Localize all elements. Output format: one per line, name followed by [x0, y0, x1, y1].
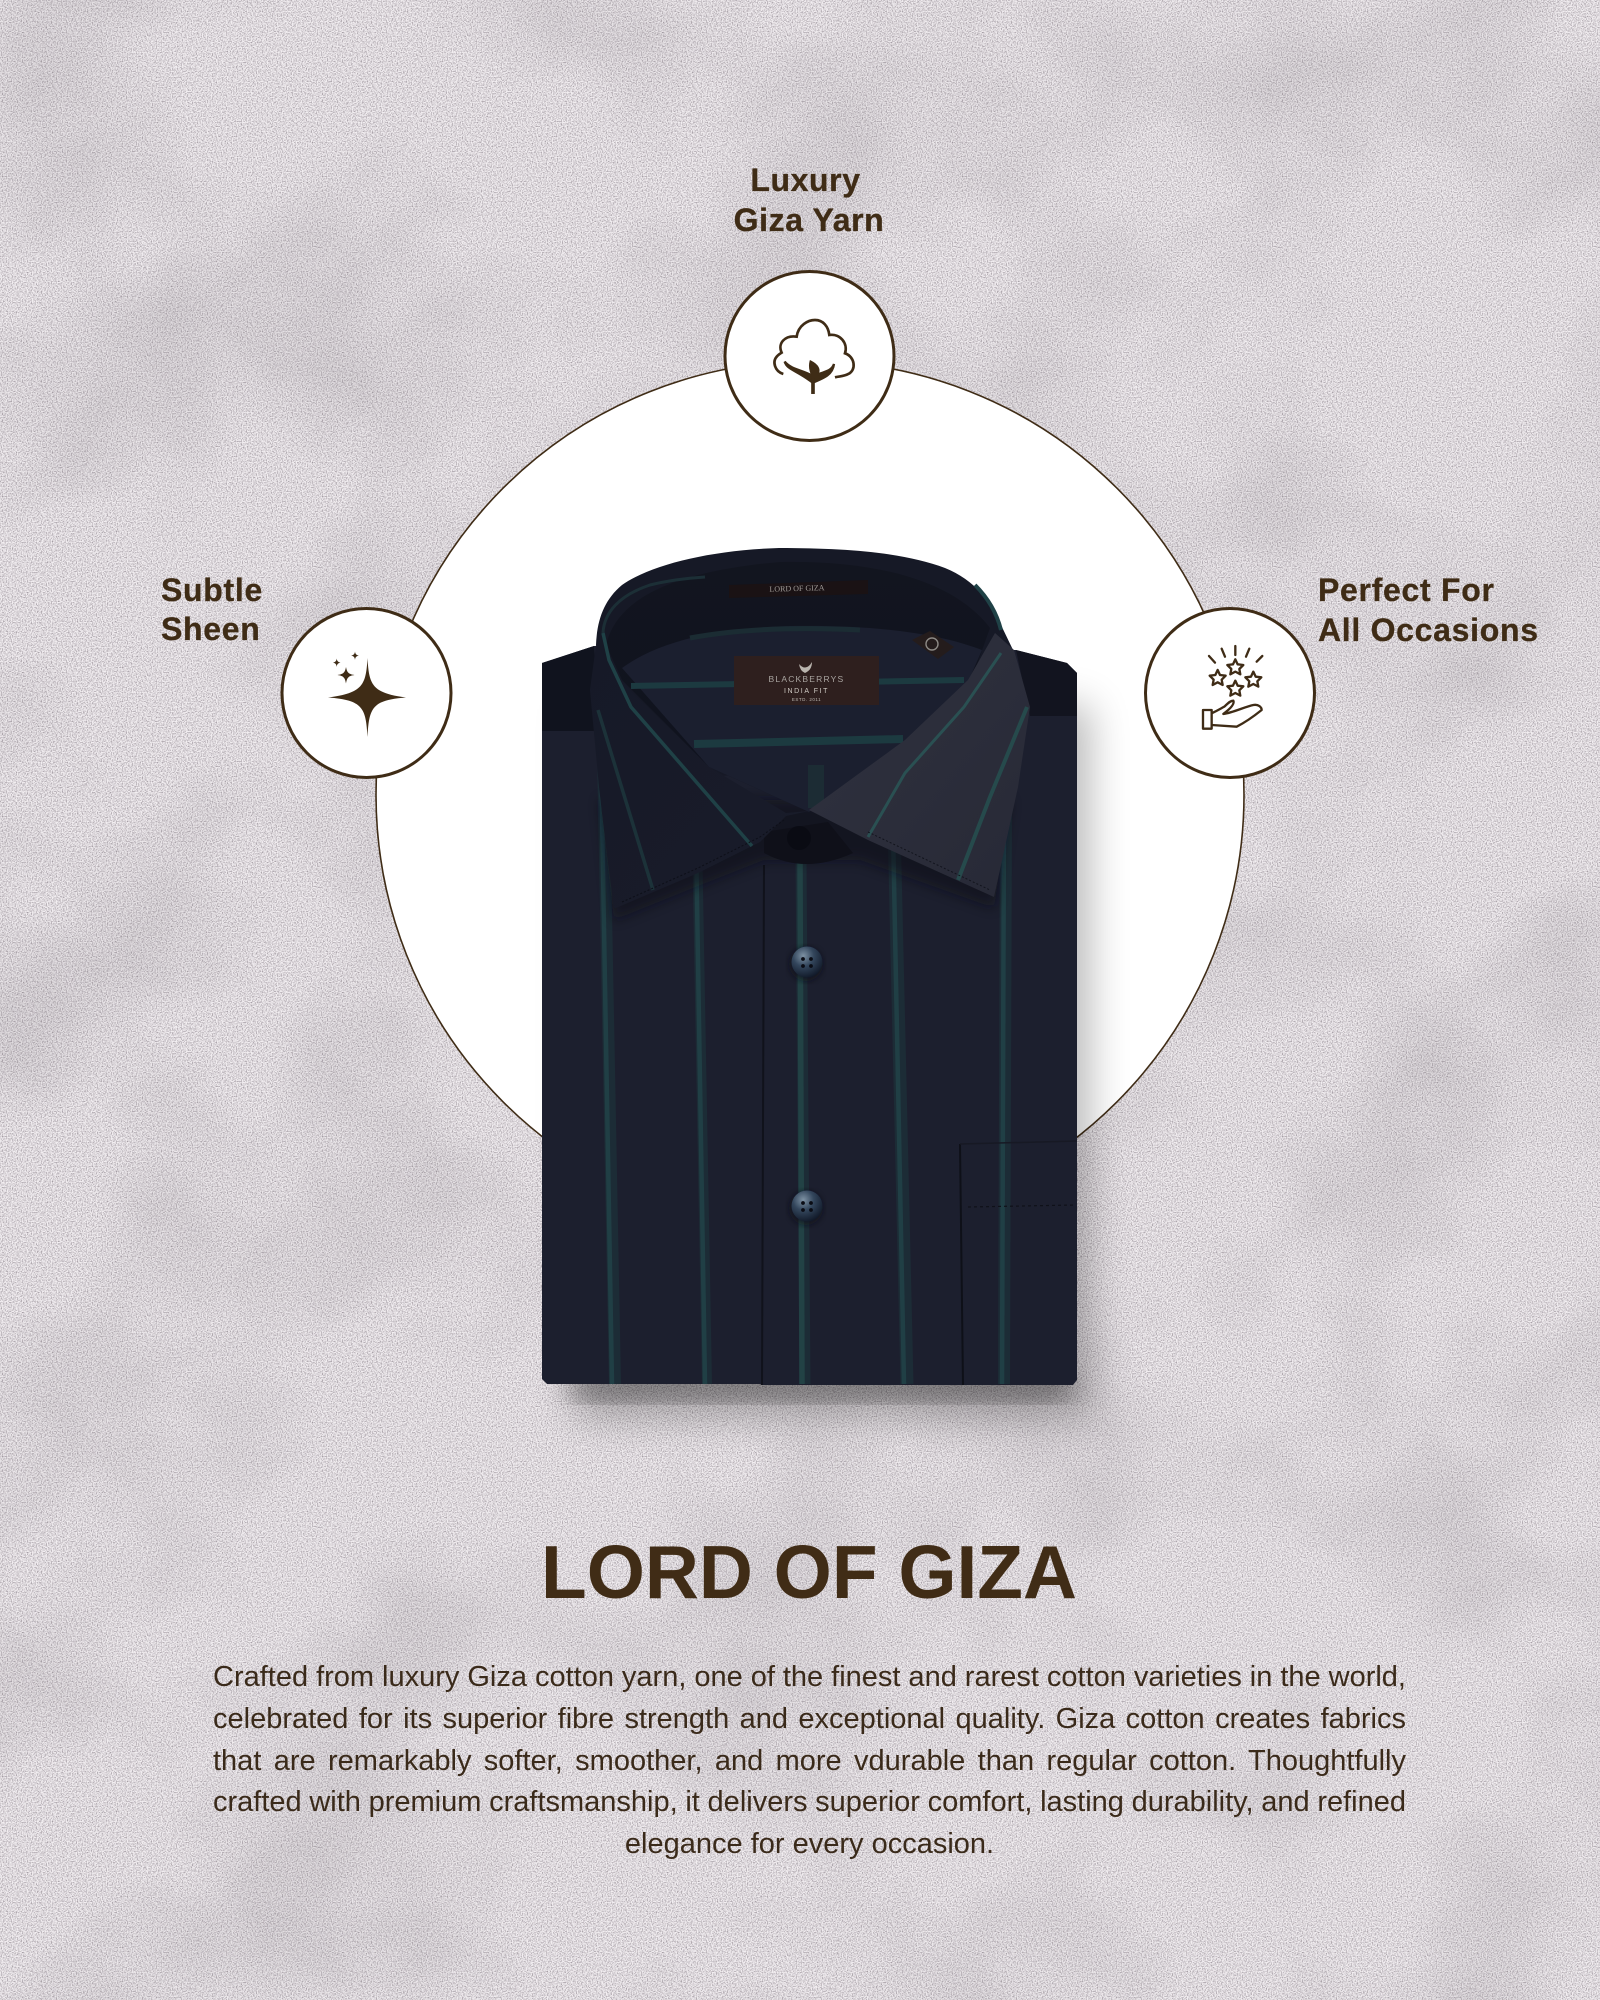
collar back band: [596, 548, 1014, 780]
label: perfect for all occasions: All Occasions: [1318, 612, 1539, 648]
shoulder yokes: [542, 646, 1077, 731]
shirt body: [542, 646, 1077, 1385]
icon: sparkle stars: [328, 652, 406, 737]
collar cast shadow: [600, 800, 1010, 920]
folded navy striped shirt: [542, 548, 1077, 1385]
badge circle: [725, 272, 894, 440]
vertical stripes: [600, 700, 1006, 1384]
feature: subtle sheen: [161, 572, 451, 778]
label: subtle sheen: Subtle: [161, 572, 263, 608]
white backdrop circle: [376, 361, 1244, 1229]
feature: luxury giza yarn: [725, 162, 894, 440]
collar right leaf: [809, 633, 1030, 897]
woven brand label: [734, 656, 879, 705]
badge circle: [282, 608, 451, 778]
shirt button lower: [789, 1190, 823, 1225]
title: LORD OF GIZA: [541, 1530, 1077, 1614]
badge circle: [1146, 608, 1314, 778]
woven brand label: BLACKBERRYS: [769, 674, 844, 684]
label: luxury giza yarn: Giza Yarn: [734, 202, 884, 238]
neck label: LORD OF GIZA: [769, 583, 825, 594]
description paragraph: celebrated for its superior fibre strength and exceptional quality. Giza cotton creates fabrics: [213, 1703, 1406, 1735]
pocket: [960, 1141, 1077, 1385]
panel stripes: [603, 577, 1001, 808]
description paragraph: that are remarkably softer, smoother, and more vdurable than regular cotton. Thoughtfully: [213, 1745, 1406, 1777]
icon: hand with stars: [1203, 646, 1262, 729]
woven brand label: INDIA FIT: [784, 688, 829, 695]
inner back panel: [622, 626, 982, 812]
icon: cotton boll: [775, 320, 854, 394]
description paragraph: crafted with premium craftsmanship, it delivers superior comfort, lasting durability, and refined: [213, 1786, 1406, 1818]
description paragraph: Crafted from luxury Giza cotton yarn, one of the finest and rarest cotton varieties in the world,: [213, 1661, 1406, 1693]
inner neck: [606, 562, 990, 812]
label: subtle sheen: Sheen: [161, 611, 261, 647]
shirt button middle: [789, 946, 823, 981]
description paragraph: elegance for every occasion.: [625, 1828, 994, 1860]
collar stand and top button: [764, 822, 853, 864]
woven brand label: ESTD. 2011: [792, 697, 821, 702]
shirt drop shadow: [570, 705, 1090, 1417]
collar left leaf: [590, 633, 809, 908]
label: luxury giza yarn: Luxury: [750, 162, 861, 198]
placket edge: [762, 865, 764, 1385]
neck label: [729, 580, 868, 598]
feature: perfect for all occasions: [1146, 572, 1539, 778]
description paragraph: [213, 1661, 1406, 1860]
label: perfect for all occasions: Perfect For: [1318, 572, 1495, 608]
size tag: [912, 631, 954, 659]
